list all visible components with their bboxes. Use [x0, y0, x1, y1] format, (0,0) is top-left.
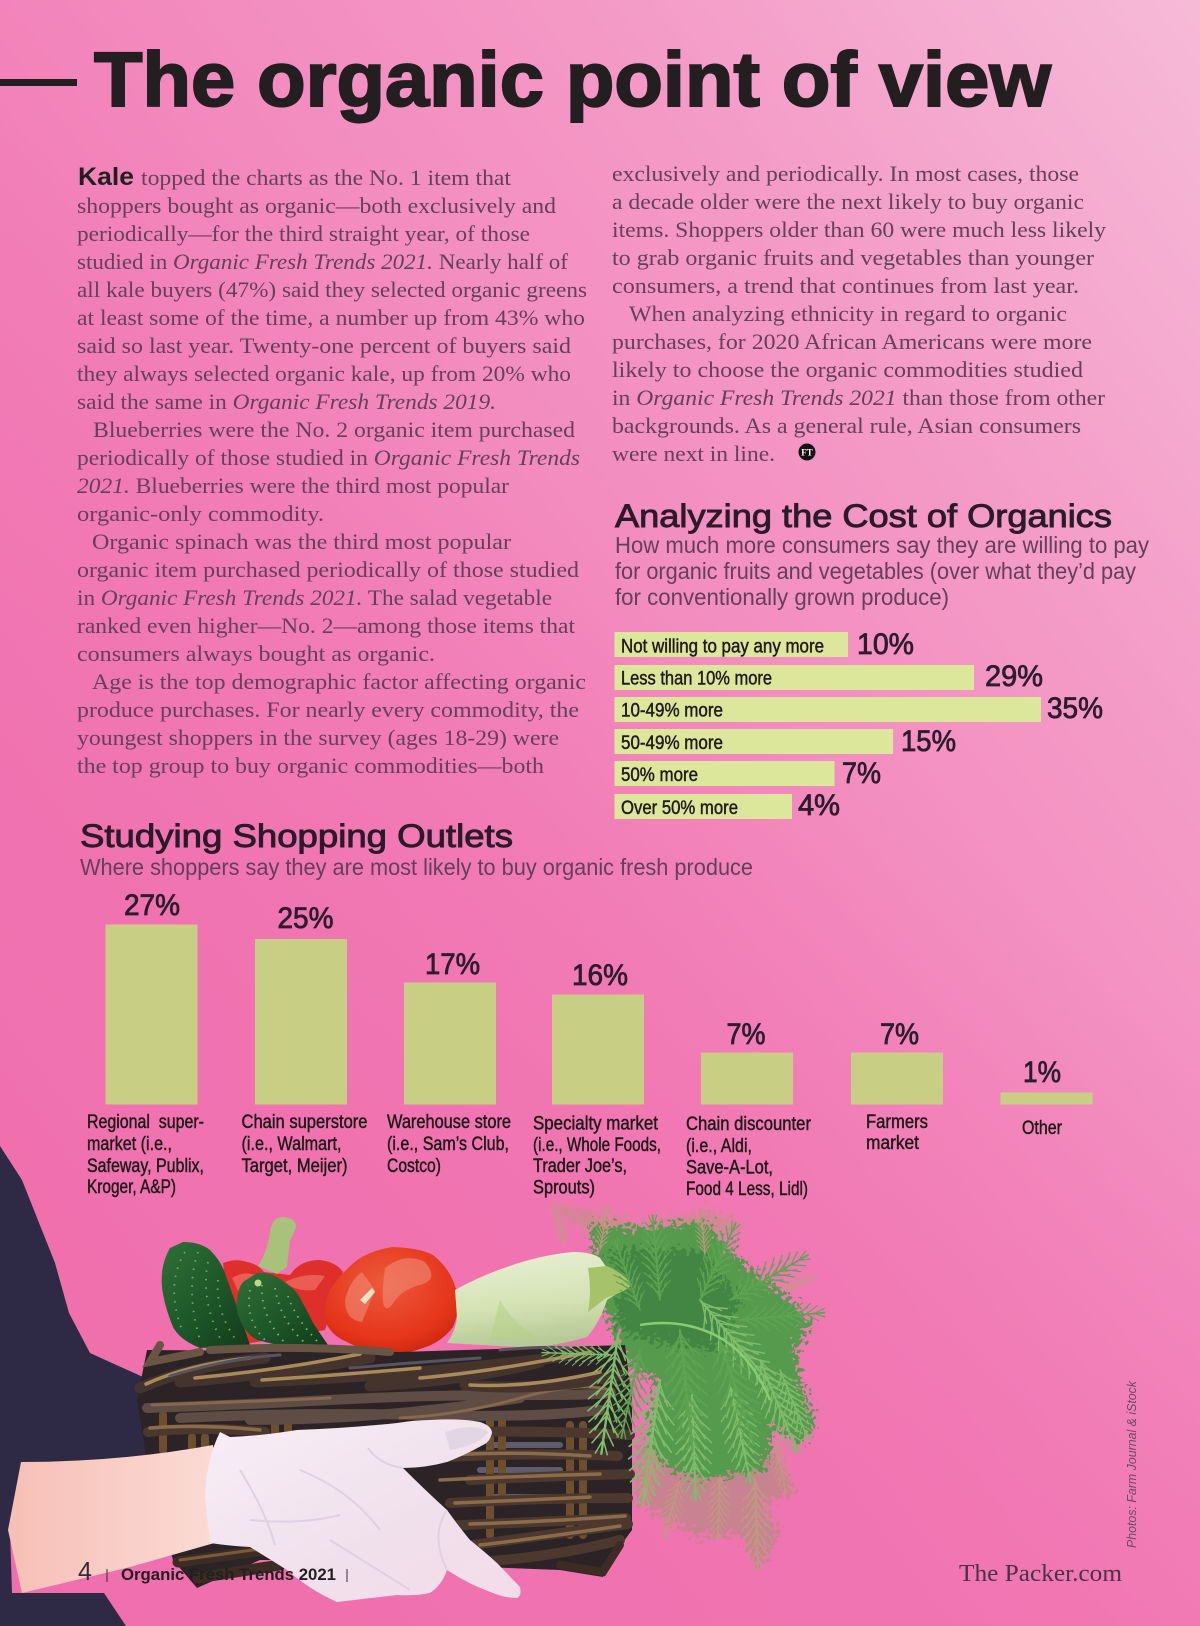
article column 1: all kale buyers (47%) said they selected organic greens	[77, 277, 587, 302]
zucchini	[447, 1252, 632, 1348]
dill bunch, back layer	[553, 1205, 815, 1570]
bar: over 50% more 4%: Over 50% more	[621, 798, 738, 819]
column: chain discounter 7%: Food 4 Less, Lidl)	[686, 1179, 808, 1200]
subheading	[615, 532, 1149, 610]
bar: not willing to pay any more 10%	[614, 628, 914, 661]
panel: analyzing the cost of organics	[614, 498, 1149, 822]
heading: Analyzing the Cost of Organics	[615, 498, 1112, 534]
bar: 10-49% more 35%: 35%	[1047, 692, 1103, 725]
icon: FT end mark: FT	[801, 448, 813, 458]
bar: 10-49% more 35%	[614, 692, 1103, 725]
subheading: How much more consumers say they are willing to pay	[615, 532, 1149, 558]
column: warehouse store 17%: (i.e., Sam’s Club,	[387, 1134, 509, 1155]
column: chain superstore 25%: (i.e., Walmart,	[242, 1134, 342, 1155]
article column 1: Blueberries were the No. 2 organic item purchased	[93, 417, 575, 442]
subheading: Where shoppers say they are most likely to buy organic fresh produce	[80, 854, 753, 880]
photo credit: Photos: Farm Journal & iStock	[1124, 1380, 1139, 1548]
article column 1: 2021. Blueberries were the third most popular	[77, 473, 510, 498]
article column 1: shoppers bought as organic—both exclusively and	[77, 193, 556, 218]
horizontal bar chart	[614, 628, 1103, 822]
article column 1: Organic spinach was the third most popular	[92, 529, 512, 554]
column: chain discounter 7%: 7%	[726, 1018, 766, 1051]
article column 1: in Organic Fresh Trends 2021. The salad vegetable	[77, 585, 552, 610]
column: chain discounter 7%: Chain discounter	[686, 1114, 812, 1135]
panel: studying shopping outlets	[80, 818, 1092, 1200]
article column 2: in Organic Fresh Trends 2021 than those from other	[612, 385, 1106, 410]
column: regional supermarket 27%	[87, 889, 204, 1198]
article column 2: exclusively and periodically. In most cases, those	[612, 161, 1079, 186]
article column 1: ranked even higher—No. 2—among those items that	[77, 613, 576, 638]
article column 2: purchases, for 2020 African Americans were more	[612, 329, 1092, 354]
article column 2: backgrounds. As a general rule, Asian consumers	[612, 413, 1081, 438]
article column 2: When analyzing ethnicity in regard to organic	[629, 301, 1067, 326]
column: farmers market 7%: market	[866, 1133, 920, 1154]
person's dark sleeve and torso	[0, 1146, 160, 1626]
column: regional supermarket 27%: market (i.e.,	[87, 1134, 172, 1155]
bar: 50% more 7%	[614, 757, 881, 790]
article column 2: items. Shoppers older than 60 were much less likely	[612, 217, 1107, 242]
column: specialty market 16%: 16%	[572, 959, 628, 992]
bar: less than 10% more 29%	[614, 660, 1043, 693]
column: farmers market 7%: Farmers	[866, 1112, 928, 1133]
column: warehouse store 17%: Warehouse store	[387, 1112, 511, 1133]
title: The organic point of view	[94, 37, 1052, 123]
lower basket twist	[147, 1392, 611, 1420]
article column 1: youngest shoppers in the survey (ages 18-29) were	[77, 725, 559, 750]
bar: 50-49% more 15%: 15%	[901, 725, 956, 758]
column: other 1%: Other	[1022, 1118, 1063, 1139]
bar: 50% more 7%: 7%	[842, 757, 881, 790]
column: specialty market 16%: (i.e., Whole Foods,	[533, 1135, 661, 1156]
bar: over 50% more 4%: 4%	[798, 789, 840, 822]
article column 1: said so last year. Twenty-one percent of buyers said	[77, 333, 571, 358]
bar: 50-49% more 15%: 50-49% more	[621, 733, 723, 754]
bar: over 50% more 4%	[614, 789, 840, 822]
bar: not willing to pay any more 10%: Not willing to pay any more	[621, 636, 824, 658]
article column 1: topped the charts as the No. 1 item that	[141, 165, 512, 190]
bar: not willing to pay any more 10%: 10%	[857, 628, 914, 661]
dill bunch, front fronds	[542, 1200, 826, 1570]
bar: 50% more 7%: 50% more	[621, 765, 698, 786]
column: regional supermarket 27%: 27%	[124, 889, 180, 922]
column: chain superstore 25%	[242, 902, 368, 1177]
article column 1: Kale	[78, 163, 134, 191]
heading: Studying Shopping Outlets	[80, 818, 513, 854]
column chart	[87, 889, 1092, 1200]
article column 1: organic-only commodity.	[77, 501, 324, 526]
column: warehouse store 17%: Costco)	[387, 1156, 441, 1177]
article column 1	[77, 163, 587, 778]
column: regional supermarket 27%: Safeway, Publix,	[87, 1156, 204, 1177]
column: other 1%: 1%	[1023, 1056, 1061, 1089]
column: other 1%	[1000, 1056, 1092, 1139]
article column 2: were next in line.	[612, 441, 775, 466]
article column 1: periodically of those studied in Organic Fresh Trends	[77, 445, 580, 470]
column: chain superstore 25%: Target, Meijer)	[242, 1156, 348, 1177]
column: regional supermarket 27%: Regional super-	[87, 1112, 204, 1133]
article column 2: to grab organic fruits and vegetables than younger	[612, 245, 1095, 270]
column: specialty market 16%: Specialty market	[533, 1114, 659, 1134]
tomato	[325, 1247, 458, 1353]
cucumbers	[162, 1242, 328, 1348]
basket bottom corner	[178, 1550, 280, 1578]
subheading: for organic fruits and vegetables (over what they’d pay	[615, 558, 1136, 584]
article column 1: produce purchases. For nearly every commodity, the	[77, 697, 579, 722]
footer: page number and publication: Organic Fresh Trends 2021	[121, 1565, 336, 1584]
wicker basket	[137, 1345, 632, 1588]
column: regional supermarket 27%: Kroger, A&P)	[87, 1177, 176, 1198]
green stem and red pepper	[223, 1217, 343, 1345]
bar: less than 10% more 29%: 29%	[985, 660, 1043, 693]
bar: 10-49% more 35%: 10-49% more	[621, 700, 723, 722]
article column 1: said the same in Organic Fresh Trends 2019.	[77, 389, 496, 414]
column: specialty market 16%: Trader Joe’s,	[533, 1156, 627, 1177]
column: chain superstore 25%: Chain superstore	[242, 1112, 368, 1133]
column: chain discounter 7%	[686, 1018, 812, 1200]
article column 1: Age is the top demographic factor affecting organic	[92, 669, 586, 694]
bar: 50-49% more 15%	[614, 725, 956, 758]
column: chain superstore 25%: 25%	[278, 902, 334, 935]
article column 1: consumers always bought as organic.	[77, 641, 435, 666]
bar: less than 10% more 29%: Less than 10% more	[621, 668, 772, 690]
column: specialty market 16%	[533, 959, 661, 1198]
footer: page number and publication	[78, 1556, 348, 1586]
article column 1: at least some of the time, a number up from 43% who	[77, 305, 585, 330]
column: chain discounter 7%: Save-A-Lot,	[686, 1158, 773, 1178]
column: farmers market 7%: 7%	[880, 1018, 919, 1051]
article column 2	[612, 161, 1107, 466]
basket body	[137, 1345, 632, 1588]
article column 2: a decade older were the next likely to buy organic	[612, 189, 1084, 214]
footer: page number and publication: 4	[78, 1556, 92, 1586]
upper rim twist	[140, 1352, 620, 1388]
forearm	[8, 1445, 225, 1593]
article column 1: periodically—for the third straight year, of those	[77, 221, 530, 246]
article column 1: organic item purchased periodically of those studied	[77, 557, 579, 582]
column: chain discounter 7%: (i.e., Aldi,	[686, 1136, 752, 1157]
photo: hands holding basket of vegetables	[0, 1146, 826, 1626]
article column 2: likely to choose the organic commodities studied	[612, 357, 1083, 382]
column: warehouse store 17%	[387, 948, 511, 1177]
column: warehouse store 17%: 17%	[425, 948, 480, 981]
article column 1: studied in Organic Fresh Trends 2021. Nearly half of	[77, 249, 569, 274]
column: farmers market 7%	[851, 1018, 943, 1154]
footer: website: The Packer.com	[959, 1561, 1122, 1587]
article column 2: consumers, a trend that continues from last year.	[612, 273, 1079, 298]
white glove	[205, 1419, 521, 1602]
column: specialty market 16%: Sprouts)	[533, 1178, 595, 1198]
article column 1: they always selected organic kale, up from 20% who	[77, 361, 571, 386]
icon: FT end mark	[798, 444, 816, 460]
title rule	[0, 79, 77, 86]
subheading: for conventionally grown produce)	[615, 584, 949, 610]
article column 1: the top group to buy organic commodities—both	[77, 753, 544, 778]
